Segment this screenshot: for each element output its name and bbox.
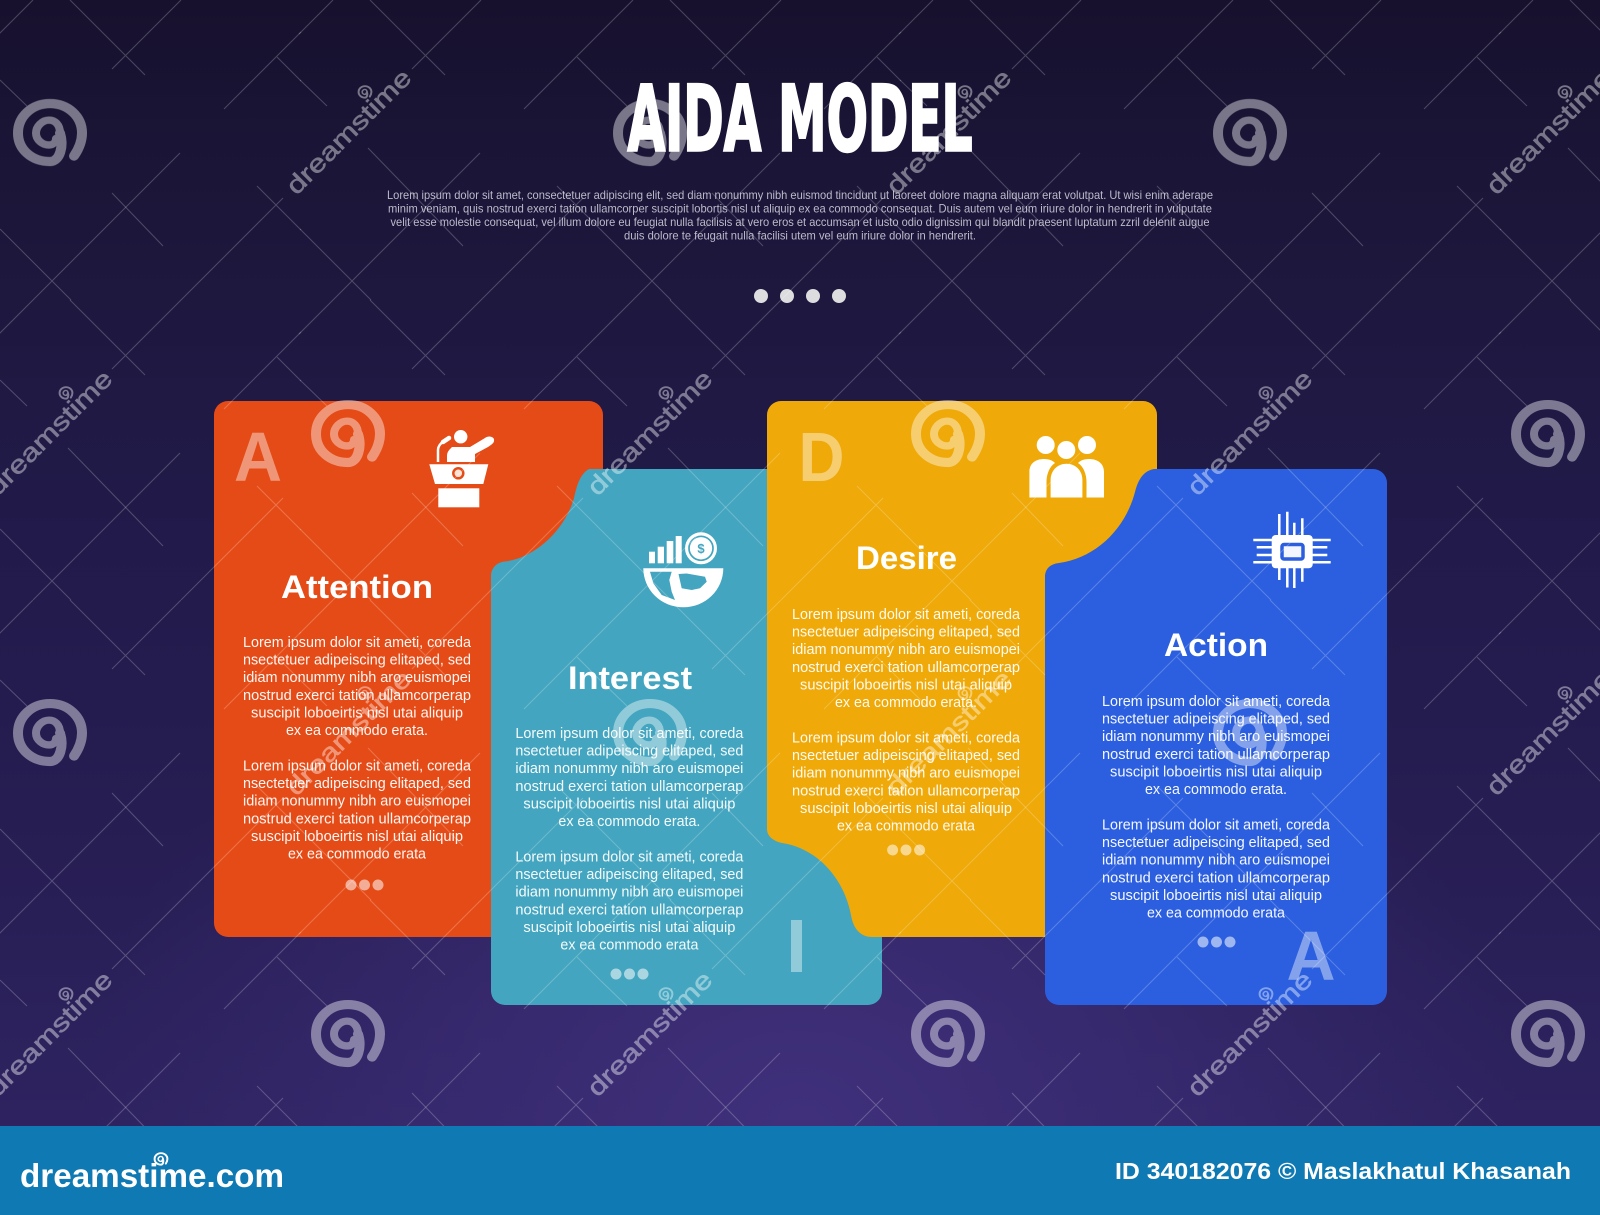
body text: action: idiam nonummy nibh aro euismopei [1102, 729, 1330, 745]
body text: attention: idiam nonummy nibh aro euismopei [243, 670, 471, 686]
body text: interest: ex ea commodo erata [560, 938, 699, 954]
body text: interest: nsectetuer adipeiscing elitaped, sed [515, 867, 743, 883]
intro paragraph [387, 188, 1213, 242]
body text: attention [243, 635, 472, 862]
icon: globe with chart and coin [643, 532, 723, 607]
dots: desire [887, 844, 925, 856]
body text: action: idiam nonummy nibh aro euismopei [1102, 853, 1330, 869]
dots: action [1198, 936, 1236, 948]
footer bar [0, 1126, 1600, 1215]
watermark overlay: dreamstime [1182, 365, 1318, 501]
body text: action: Lorem ipsum dolor sit ameti, coreda [1102, 818, 1331, 834]
footer credit: ID 340182076 © Maslakhatul Khasanah [1115, 1158, 1571, 1184]
card shape: interest [491, 469, 882, 1005]
watermark overlay: dreamstime [582, 365, 718, 501]
body text: interest: nostrud exerci tation ullamcorperap [515, 779, 743, 795]
body text: interest: idiam nonummy nibh aro euismopei [515, 885, 743, 901]
body text: attention: suscipit loboeirtis nisl utai aliquip [251, 829, 463, 845]
body text: desire: Lorem ipsum dolor sit ameti, coreda [792, 607, 1021, 623]
body text: action: Lorem ipsum dolor sit ameti, coreda [1102, 694, 1331, 710]
watermark overlay: dreamstime [1481, 665, 1600, 801]
watermark overlay: dreamstime [582, 966, 718, 1102]
letter A: A [1286, 917, 1336, 995]
body text: action: suscipit loboeirtis nisl utai aliquip [1110, 888, 1322, 904]
body text: attention: nostrud exerci tation ullamcorperap [243, 688, 471, 704]
letter D: D [798, 418, 844, 496]
body text: interest: nostrud exerci tation ullamcorperap [515, 902, 743, 918]
heading: desire: Desire [856, 540, 957, 576]
heading: action: Action [1164, 627, 1268, 663]
intro paragraph: Lorem ipsum dolor sit amet, consectetuer adipiscing elit, sed diam nonummy nibh euismod tincidunt ut laoreet dolore magna aliquam erat volutpat. Ut wisi enim aderape [387, 188, 1213, 202]
body text: interest: ex ea commodo erata. [558, 814, 700, 830]
watermark overlay: dreamstime [281, 665, 417, 801]
body text: action: nsectetuer adipeiscing elitaped, sed [1102, 835, 1330, 851]
pagination dots [754, 289, 846, 303]
body text: interest: Lorem ipsum dolor sit ameti, coreda [515, 726, 744, 742]
dots: interest [610, 968, 648, 980]
body text: attention: nsectetuer adipeiscing elitaped, sed [243, 653, 471, 669]
body text: desire: nsectetuer adipeiscing elitaped, sed [792, 625, 1020, 641]
intro paragraph: minim veniam, quis nostrud exerci tation ullamcorper suscipit lobortis nisl ut aliquip ex ea commodo consequat. Duis autem vel eum iriure dolor in hendrerit in vulputate [388, 201, 1212, 215]
footer logo: dreamstime.com [20, 1157, 284, 1194]
panel: attention [214, 401, 603, 937]
panel: desire [767, 401, 1157, 937]
watermark overlay: dreamstime [881, 665, 1017, 801]
body text: desire: Lorem ipsum dolor sit ameti, coreda [792, 730, 1021, 746]
body text: desire: nsectetuer adipeiscing elitaped, sed [792, 748, 1020, 764]
icon: speaker at podium [429, 430, 494, 507]
body text: interest: nsectetuer adipeiscing elitaped, sed [515, 744, 743, 760]
body text: desire: suscipit loboeirtis nisl utai aliquip [800, 677, 1012, 693]
icon: microchip [1253, 512, 1331, 588]
body text: desire: nostrud exerci tation ullamcorperap [792, 783, 1020, 799]
body text: attention: Lorem ipsum dolor sit ameti, coreda [243, 635, 472, 651]
body text: attention: Lorem ipsum dolor sit ameti, coreda [243, 758, 472, 774]
panel: action [1045, 469, 1387, 1005]
heading: attention: Attention [281, 569, 433, 605]
body text: attention: nsectetuer adipeiscing elitaped, sed [243, 776, 471, 792]
body text: interest: Lorem ipsum dolor sit ameti, coreda [515, 850, 744, 866]
panel: interest [491, 469, 882, 1005]
body text: attention: ex ea commodo erata. [286, 723, 428, 739]
icon: group of people [1029, 436, 1104, 498]
intro paragraph: velit esse molestie consequat, vel illum dolore eu feugiat nulla facilisis at vero eros et accumsan et iusto odio dignissim qui blandit praesent luptatum zzril delenit augue [390, 215, 1210, 229]
dots: attention [346, 880, 384, 890]
body text: desire: suscipit loboeirtis nisl utai aliquip [800, 801, 1012, 817]
watermark overlay: dreamstime [881, 64, 1017, 200]
body text: action: ex ea commodo erata. [1145, 782, 1287, 798]
card shape: attention [214, 401, 603, 937]
watermark overlay: dreamstime [281, 64, 417, 200]
body text: desire: nostrud exerci tation ullamcorperap [792, 660, 1020, 676]
body text: desire [792, 607, 1021, 834]
body text: attention: suscipit loboeirtis nisl utai aliquip [251, 705, 463, 721]
body text: attention: ex ea commodo erata [288, 846, 427, 862]
body text: desire: ex ea commodo erata [837, 818, 976, 834]
body text: interest: suscipit loboeirtis nisl utai aliquip [523, 920, 735, 936]
body text: attention: nostrud exerci tation ullamcorperap [243, 811, 471, 827]
card shape: desire [767, 401, 1157, 937]
card shape: action [1045, 469, 1387, 1005]
title: AIDA MODEL [628, 68, 972, 172]
intro paragraph: duis dolore te feugait nulla facilisi utem vel eum iriure dolor in hendrerit. [624, 228, 976, 242]
heading: interest: Interest [568, 660, 692, 696]
letter A: A [234, 418, 282, 496]
body text: action: suscipit loboeirtis nisl utai aliquip [1110, 764, 1322, 780]
body text: desire: idiam nonummy nibh aro euismopei [792, 642, 1020, 658]
watermark overlay: dreamstime [1182, 966, 1318, 1102]
body text: action: nostrud exerci tation ullamcorperap [1102, 747, 1330, 763]
body text: attention: idiam nonummy nibh aro euismopei [243, 794, 471, 810]
body text: action: ex ea commodo erata [1147, 906, 1286, 922]
icon: globe with chart and coin: $ [697, 541, 705, 556]
body text: action: nsectetuer adipeiscing elitaped, sed [1102, 712, 1330, 728]
watermark overlay: dreamstime [1481, 64, 1600, 200]
body text: interest: idiam nonummy nibh aro euismopei [515, 761, 743, 777]
body text: desire: idiam nonummy nibh aro euismopei [792, 766, 1020, 782]
letter I [791, 920, 802, 972]
body text: action: nostrud exerci tation ullamcorperap [1102, 870, 1330, 886]
body text: desire: ex ea commodo erata. [835, 695, 977, 711]
body text: action [1102, 694, 1331, 922]
body text: interest [515, 726, 744, 954]
body text: interest: suscipit loboeirtis nisl utai aliquip [523, 796, 735, 812]
